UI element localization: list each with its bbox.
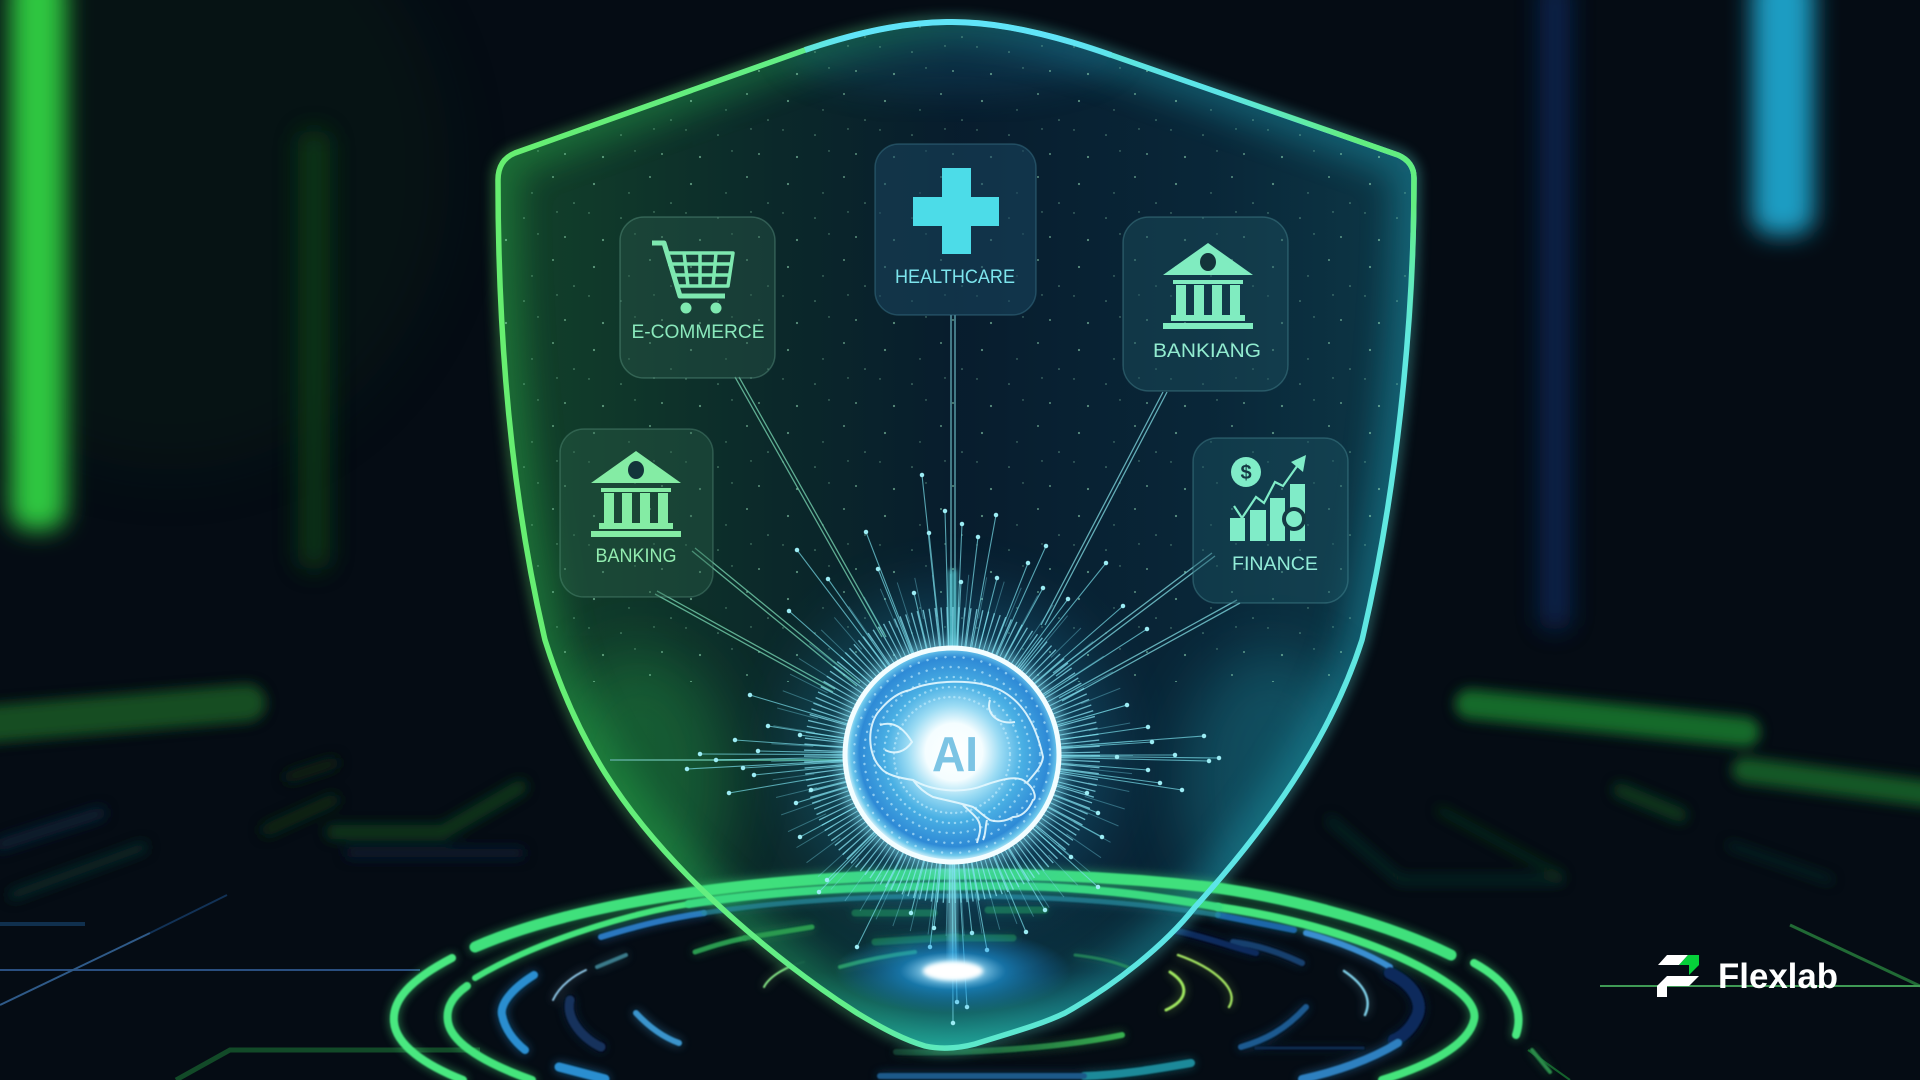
- lower-right teal wash: [1180, 650, 1360, 910]
- outer green ring segments: [394, 958, 1519, 1080]
- Flexlab logo: [1657, 955, 1838, 997]
- light source beneath the orb: [835, 929, 1071, 1013]
- shield outline: [498, 22, 1414, 1048]
- shield glow: [498, 22, 1414, 1048]
- lower-left green wash: [550, 650, 730, 910]
- vertical light bundles: [948, 570, 957, 970]
- icon: medical cross: [913, 168, 999, 254]
- brain outline: [870, 682, 1043, 843]
- burst glow: [787, 590, 1117, 920]
- label: E-commerce: E-COMMERCE: [632, 322, 764, 343]
- inner arcs: [569, 1000, 601, 1047]
- holographic floor rings: [394, 904, 1550, 1080]
- panel: Banking: [560, 429, 713, 597]
- particle burst around AI core: [687, 475, 1219, 1023]
- icon: bank building: [591, 451, 681, 537]
- background circuit lines: [0, 895, 1920, 1080]
- icon: finance chart: $: [1240, 462, 1252, 484]
- panel: Finance: [1193, 438, 1348, 603]
- background streaks: blurred green: [0, 703, 1920, 895]
- panel: Bankiang: [1123, 217, 1288, 391]
- background bar: dim blue: [1540, 0, 1570, 630]
- label: Healthcare: HEALTHCARE: [895, 267, 1015, 288]
- orb speckle texture: [854, 657, 1050, 853]
- panel: Healthcare: [875, 144, 1036, 315]
- icon: finance chart: [1230, 455, 1306, 541]
- filament end dots: [687, 475, 1219, 1023]
- background glow: dark green haze: [0, 0, 450, 470]
- blue ring segments: [502, 913, 1419, 1079]
- label: Finance: FINANCE: [1232, 554, 1318, 575]
- background bar: dim green: [298, 130, 330, 570]
- shield body: [498, 5, 1414, 1050]
- background bar: bright green: [10, 0, 66, 530]
- filament lines: [687, 475, 1219, 1023]
- background bar: cyan: [1752, 0, 1814, 235]
- label: Bankiang: BANKIANG: [1153, 341, 1261, 362]
- icon: bank building: [1163, 243, 1253, 329]
- panel: E-commerce: [620, 217, 775, 378]
- AI core orb: [836, 639, 1068, 871]
- connector lines from industry panels to AI core: [610, 315, 1240, 760]
- inner edge glow: [498, 5, 1414, 1050]
- dense radial rays: [792, 595, 1112, 915]
- second green ring: [448, 904, 1474, 1080]
- label: AI: AI: [932, 728, 978, 782]
- ring band passing through the shield: [475, 874, 1451, 968]
- logo mark: [1657, 955, 1699, 997]
- label: Banking: BANKING: [596, 546, 676, 567]
- icon: shopping cart: [652, 243, 733, 314]
- logo wordmark: Flexlab: [1718, 957, 1838, 996]
